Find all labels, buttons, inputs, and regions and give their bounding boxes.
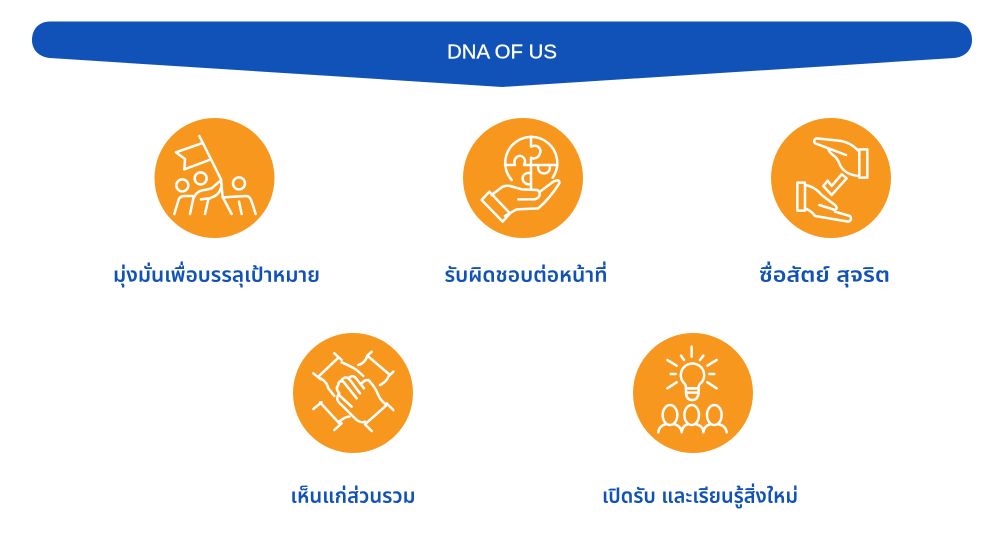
icon: hand holding puzzle bbox=[463, 118, 583, 238]
icon: people with lightbulb bbox=[633, 333, 753, 453]
title: DNA OF US bbox=[447, 42, 557, 64]
label: sharing: เห็นแก่ส่วนรวม bbox=[290, 486, 416, 508]
header banner bbox=[32, 22, 972, 87]
label: open to learning: เปิดรับ และเรียนรู้สิ่งใหม่ bbox=[602, 483, 798, 509]
label: goal commitment: มุ่งมั่นเพื่อบรรลุเป้าหมาย bbox=[113, 261, 320, 287]
label: responsibility: รับผิดชอบต่อหน้าที่ bbox=[444, 261, 608, 287]
icon: stacked hands bbox=[293, 333, 413, 453]
icon: honest hands with check bbox=[771, 118, 891, 238]
icon: team raising flag bbox=[154, 118, 274, 238]
label: honesty: ซื่อสัตย์ สุจริต bbox=[759, 261, 890, 287]
